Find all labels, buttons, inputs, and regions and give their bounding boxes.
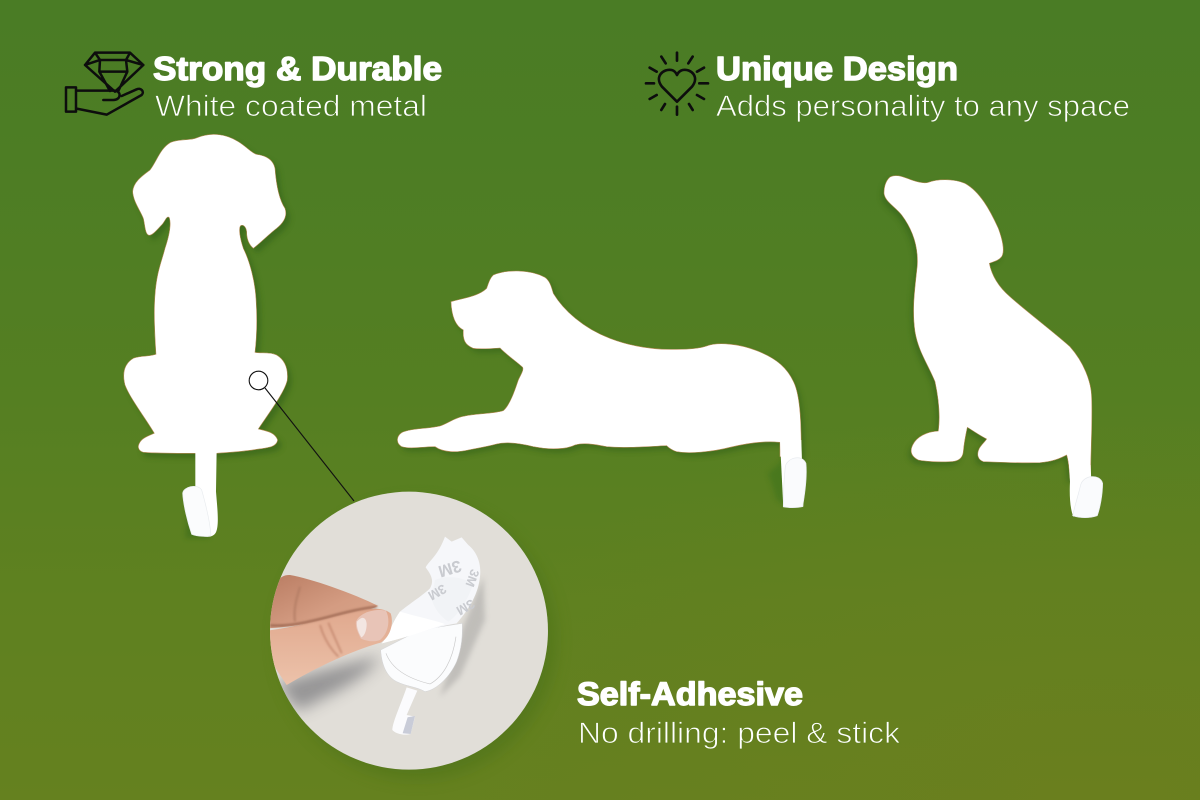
text: Adds personality to any space: Adds personality to any space	[716, 90, 1130, 123]
fingernail	[356, 610, 388, 641]
shadow under hand	[277, 657, 380, 710]
heading: Unique Design: Unique Design	[716, 50, 958, 87]
hook stem	[195, 450, 218, 537]
dog hook: sitting from behind	[124, 134, 291, 538]
photo circle: peeling adhesive	[260, 480, 560, 780]
hook body	[381, 623, 462, 692]
hook tip	[1073, 477, 1103, 518]
dog hook: sitting profile	[881, 176, 1103, 518]
lower finger	[267, 609, 392, 685]
hook tip	[783, 458, 806, 508]
3M marks	[428, 560, 479, 616]
icon: heart with rays	[646, 53, 708, 115]
3M marks: 3M	[436, 556, 464, 581]
callout: small circle and leader line	[249, 371, 354, 501]
3M marks: 3M	[425, 581, 449, 603]
heading: Self-Adhesive: Self-Adhesive	[577, 676, 803, 712]
upper finger	[267, 575, 378, 628]
text: White coated metal: White coated metal	[155, 90, 427, 123]
icon: diamond on hand	[66, 53, 143, 115]
dog hook: lying down	[397, 271, 806, 508]
peeled film	[382, 537, 480, 643]
hook stem	[392, 687, 417, 735]
3M marks: 3M	[462, 567, 482, 589]
heading: Strong & Durable: Strong & Durable	[153, 50, 442, 87]
text: No drilling: peel & stick: No drilling: peel & stick	[578, 717, 901, 750]
hook tip	[183, 486, 211, 536]
finger crease	[270, 607, 377, 626]
3M marks: 3M	[454, 596, 477, 618]
